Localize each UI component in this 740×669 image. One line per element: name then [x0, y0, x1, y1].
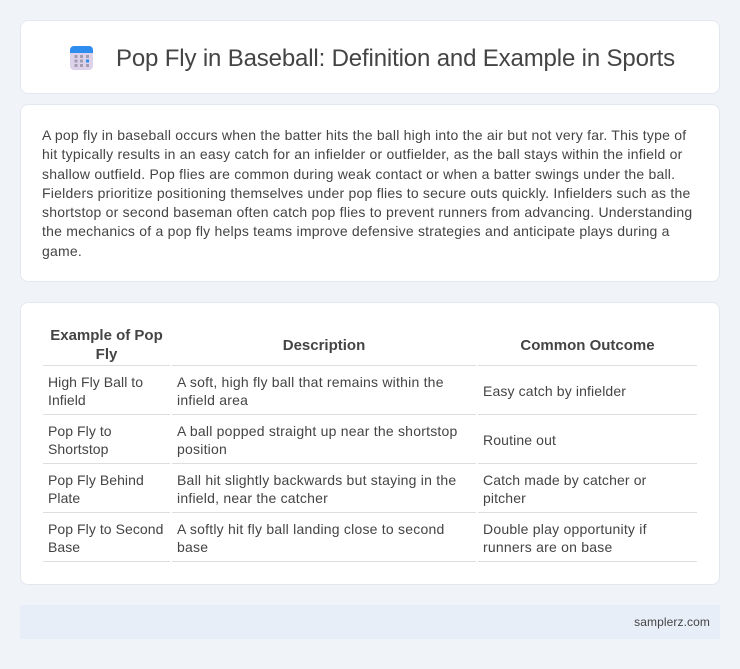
- panel: title header: [20, 20, 720, 94]
- table row 1: Infield: [48, 392, 86, 408]
- table row 1: A soft, high fly ball that remains within the: [177, 374, 444, 390]
- text block: definition: shallow outfield. Pop flies are common during weak contact or when a batter swings under the ball.: [42, 166, 675, 182]
- text block: definition: the mechanics of a pop fly helps teams improve defensive strategies and anticipate plays during a: [42, 223, 670, 239]
- text block: definition: hit typically results in an easy catch for an infielder or outfielder, as the ball stays within the infield or: [42, 146, 683, 162]
- table row 2: Routine out: [483, 432, 556, 448]
- table row 2: Pop Fly to: [48, 423, 112, 439]
- table header row: Description: [283, 337, 365, 354]
- table row 1: infield area: [177, 392, 248, 408]
- table row 3: pitcher: [483, 490, 526, 506]
- table row 2: Shortstop: [48, 441, 108, 457]
- table row 4: runners are on base: [483, 539, 612, 555]
- table: pop fly examples: [43, 327, 697, 562]
- footer text: samplerz.com: [634, 615, 710, 629]
- text block: definition: shortstop or second baseman often catch pop flies to prevent runners from advancing. Understanding: [42, 204, 692, 220]
- table row 2: [48, 423, 556, 457]
- table row 3: Catch made by catcher or: [483, 472, 646, 488]
- table row 1: High Fly Ball to: [48, 374, 143, 390]
- footer bar: [20, 605, 720, 639]
- table row 4: base: [177, 539, 208, 555]
- table row 4: Double play opportunity if: [483, 521, 647, 537]
- panel: table card: [20, 302, 720, 585]
- text block: definition: A pop fly in baseball occurs when the batter hits the ball high into the air but not very far. This type of: [42, 127, 686, 143]
- text block: definition: [42, 127, 692, 259]
- table header row: Fly: [96, 346, 117, 363]
- table row 1: [48, 374, 626, 408]
- table row 4: A softly hit fly ball landing close to second: [177, 521, 444, 537]
- panel: definition paragraph: [20, 104, 720, 282]
- table row 2: position: [177, 441, 227, 457]
- table row 4: Base: [48, 539, 80, 555]
- text block: definition: game.: [42, 243, 82, 259]
- table row 2: A ball popped straight up near the shortstop: [177, 423, 458, 439]
- table row 3: Pop Fly Behind: [48, 472, 144, 488]
- table header row: [50, 327, 655, 363]
- table row 1: Easy catch by infielder: [483, 383, 626, 399]
- text block: definition: Fielders prioritize positioning themselves under pop flies to secure outs quickly. Infielders such as the: [42, 185, 690, 201]
- table row 3: [48, 472, 646, 506]
- table row 3: infield, near the catcher: [177, 490, 328, 506]
- table row 3: Ball hit slightly backwards but staying in the: [177, 472, 456, 488]
- title: Pop Fly in Baseball: Definition and Example in Sports: [116, 45, 675, 72]
- table header row: Example of Pop: [50, 327, 163, 344]
- table row 3: Plate: [48, 490, 80, 506]
- table header row: Common Outcome: [520, 337, 655, 354]
- table row 4: Pop Fly to Second: [48, 521, 163, 537]
- icon: calendar: [70, 46, 93, 70]
